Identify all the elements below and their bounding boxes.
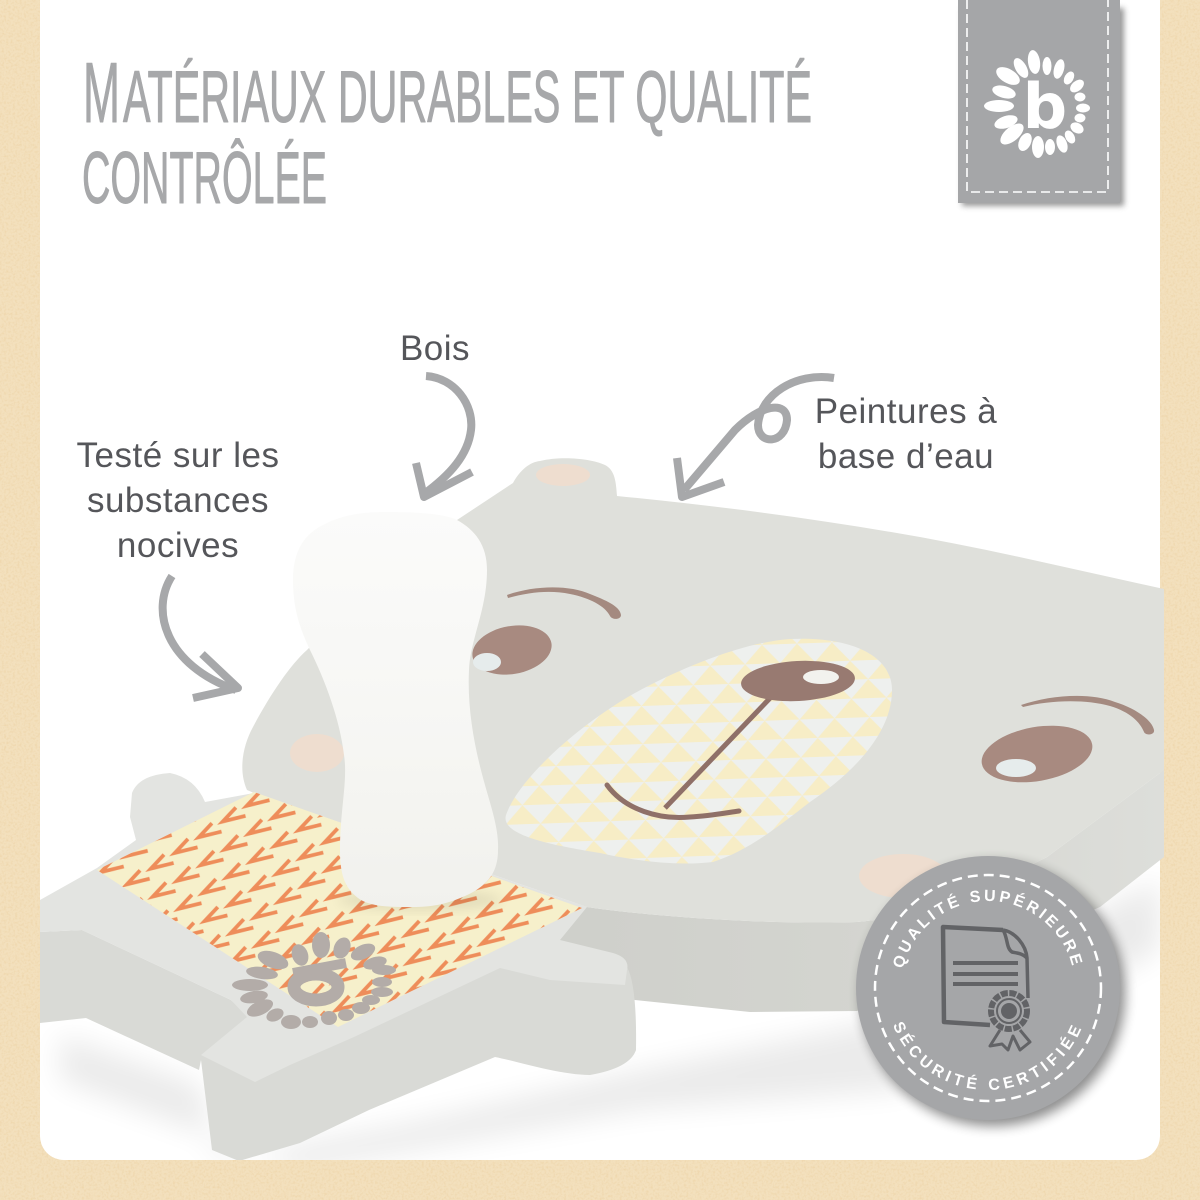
right eye [982,726,1092,782]
label: testé sur les substances nocives [77,441,278,558]
printed logo [232,932,396,1029]
bear body [40,512,636,1161]
label: testé sur les substances nocives: Testé sur les [77,436,279,475]
seal text bottom: SÉCURITÉ CERTIFIÉE [894,1022,1082,1090]
label: peintures à base d'eau [818,397,997,468]
label: peintures à base d'eau: base d’eau [818,437,994,476]
muzzle [506,639,892,864]
icon: brand flower logo: b [1023,70,1067,143]
eyebrows [507,587,1154,734]
arrow: to wood peg [416,376,472,497]
peg shadow [344,892,496,911]
arrow: to bear toy [163,576,238,698]
body top face [40,773,627,1082]
nose and mouth [607,658,856,818]
title [82,46,812,219]
label: bois: Bois [400,329,470,368]
title: M [83,46,120,141]
label: testé sur les substances nocives: substances [87,481,269,520]
bear head [242,458,1164,923]
wooden peg [293,512,498,907]
bear toy photo [40,334,1164,1160]
floor shadow [60,880,1160,1170]
left eye [472,625,552,675]
arrow: to painted head [677,377,834,497]
icon: brand flower logo [984,49,1090,158]
left cheek [290,734,344,772]
label: testé sur les substances nocives: nocives [117,526,239,565]
right cheek [859,854,947,898]
brand tag [958,0,1124,206]
seal text top: QUALITÉ SUPÉRIEURE [894,890,1082,968]
bear head side [520,770,1164,1012]
quality seal [853,854,1133,1134]
chevron patch [97,792,582,1027]
title: CONTRÔLÉE [82,138,327,219]
icon: certificate [943,927,1030,1050]
ear spot [536,464,590,486]
label: peintures à base d'eau: Peintures à [815,392,997,431]
